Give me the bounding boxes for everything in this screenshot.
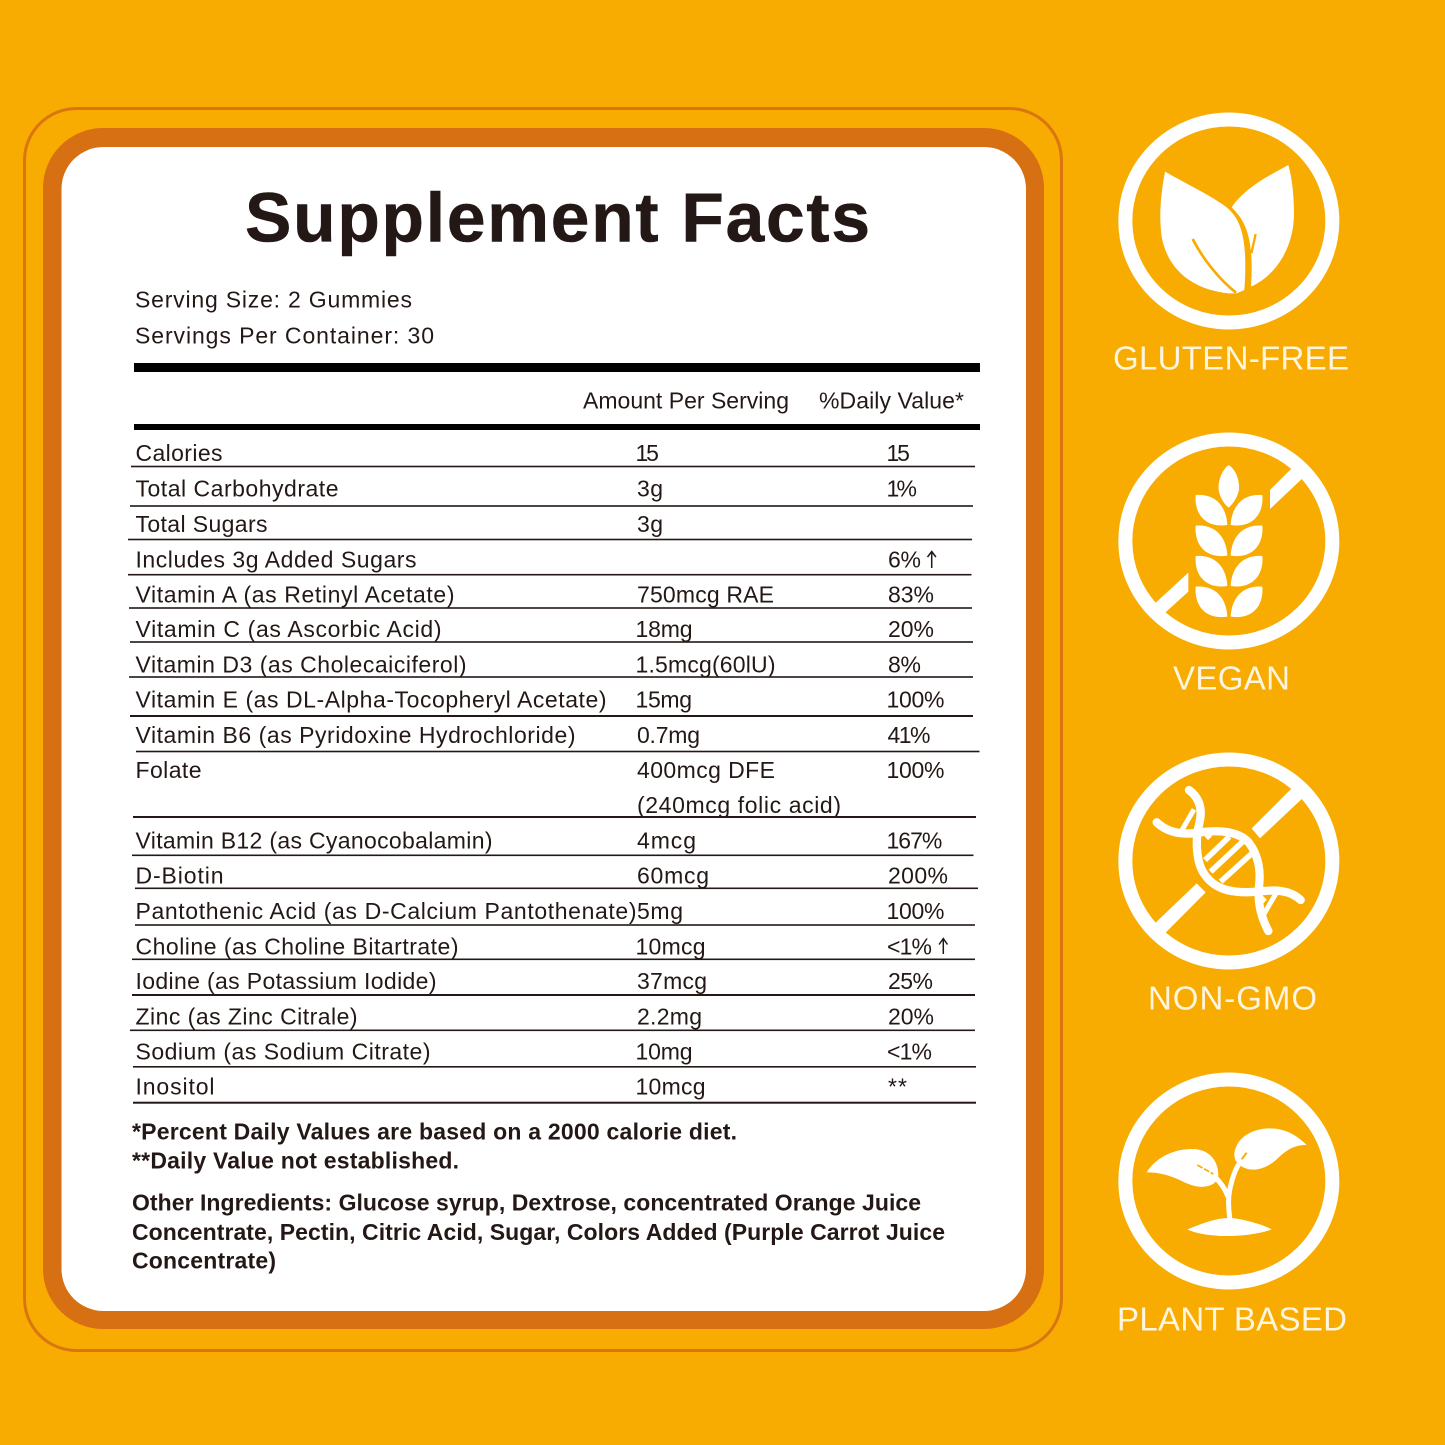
row: zinc: Zinc (as Zinc Citrale) xyxy=(136,1003,358,1029)
serving info xyxy=(135,286,434,348)
row: sodium: 10mg xyxy=(636,1039,692,1065)
row: iodine: Iodine (as Potassium Iodide) xyxy=(136,968,436,994)
row: vitamin A xyxy=(129,582,972,609)
nutrient table xyxy=(128,440,980,1104)
row: added sugars: Includes 3g Added Sugars xyxy=(136,547,416,573)
row: inositol xyxy=(133,1074,976,1104)
footnotes: **Daily Value not established. xyxy=(132,1147,459,1173)
other ingredients: Concentrate, Pectin, Citric Acid, Sugar, Colors Added (Purple Carrot Juice xyxy=(132,1219,945,1245)
badge: plant based xyxy=(1117,1079,1347,1338)
row: vitamin C: 20% xyxy=(888,616,934,642)
row: pantothenic acid xyxy=(135,898,975,926)
row: choline: Choline (as Choline Bitartrate) xyxy=(136,933,458,959)
row: iodine: 25% xyxy=(888,968,933,994)
row: inositol: Inositol xyxy=(136,1074,214,1100)
row: d-biotin: D-Biotin xyxy=(136,863,224,889)
badge: vegan xyxy=(1125,439,1332,696)
label: vegan: VEGAN xyxy=(1173,659,1290,696)
row: vitamin B12: 4mcg xyxy=(637,827,696,853)
row: vitamin B12: Vitamin B12 (as Cyanocobalamin) xyxy=(136,827,492,853)
row: vitamin E xyxy=(130,687,973,717)
table header: %Daily Value* xyxy=(819,387,964,413)
row: zinc xyxy=(130,1003,975,1031)
row: folate: (240mcg folic acid) xyxy=(637,792,841,818)
row: choline: <1% xyxy=(887,933,932,959)
row: sodium: Sodium (as Sodium Citrate) xyxy=(136,1039,430,1065)
icon: crossed dna helix xyxy=(1125,759,1332,962)
row: vitamin E: 100% xyxy=(886,687,944,713)
badge: non-gmo xyxy=(1125,759,1332,1016)
row: pantothenic acid: 5mg xyxy=(637,898,683,924)
row: total carbohydrate: 3g xyxy=(637,476,663,502)
row: vitamin B12: 167% xyxy=(886,827,942,853)
row: folate: 100% xyxy=(886,757,944,783)
footnotes: *Percent Daily Values are based on a 2000 calorie diet. xyxy=(132,1118,737,1144)
row: calories: 15 xyxy=(886,440,910,466)
row: calories xyxy=(131,440,975,467)
label: non-gmo: NON-GMO xyxy=(1148,979,1317,1016)
serving info: Servings Per Container: 30 xyxy=(135,322,434,348)
row: total carbohydrate xyxy=(130,476,973,507)
row: d-biotin: 60mcg xyxy=(637,863,709,889)
row: total carbohydrate: Total Carbohydrate xyxy=(136,476,338,502)
row: choline xyxy=(132,933,975,960)
row: pantothenic acid: Pantothenic Acid (as D-Calcium Pantothenate) xyxy=(136,898,636,924)
row: iodine xyxy=(132,968,975,996)
row: total sugars xyxy=(128,511,972,540)
row: vitamin D3 xyxy=(129,651,973,678)
label: plant based: PLANT BASED xyxy=(1117,1301,1347,1338)
row: vitamin C xyxy=(130,616,973,643)
row: vitamin B6: 41% xyxy=(888,722,930,748)
row: total sugars: Total Sugars xyxy=(136,511,268,537)
row: choline: 10mcg xyxy=(636,933,706,959)
icon: sprout xyxy=(1125,1079,1332,1282)
label: gluten-free: GLUTEN-FREE xyxy=(1113,339,1349,376)
row: vitamin B12 xyxy=(132,827,974,856)
row: folate xyxy=(133,757,976,818)
icon: up arrow xyxy=(939,938,948,954)
row: total carbohydrate: 1% xyxy=(886,476,917,502)
row: vitamin A: Vitamin A (as Retinyl Acetate) xyxy=(136,582,454,608)
row: zinc: 20% xyxy=(888,1003,934,1029)
row: vitamin A: 750mcg RAE xyxy=(637,582,774,608)
row: vitamin B6: Vitamin B6 (as Pyridoxine Hydrochloride) xyxy=(136,722,576,748)
row: vitamin D3: 1.5mcg(60lU) xyxy=(636,651,776,677)
panel: supplement facts label xyxy=(24,108,1062,1350)
row: vitamin D3: Vitamin D3 (as Cholecaiciferol) xyxy=(136,651,466,677)
other ingredients xyxy=(132,1190,945,1274)
row: total sugars: 3g xyxy=(637,511,663,537)
row: folate: 400mcg DFE xyxy=(637,757,775,783)
other ingredients: Concentrate) xyxy=(132,1248,276,1274)
row: added sugars: 6% xyxy=(888,547,921,573)
title: Supplement Facts xyxy=(245,179,870,257)
row: zinc: 2.2mg xyxy=(637,1003,702,1029)
row: vitamin B6: 0.7mg xyxy=(637,722,700,748)
row: sodium: <1% xyxy=(887,1039,932,1065)
row: vitamin E: 15mg xyxy=(636,687,692,713)
table header xyxy=(134,363,980,430)
row: inositol: 10mcg xyxy=(636,1074,706,1100)
footnotes xyxy=(132,1118,737,1173)
row: vitamin D3: 8% xyxy=(888,651,921,677)
icon: crossed wheat xyxy=(1125,439,1332,642)
row: inositol: ** xyxy=(888,1074,907,1100)
row: added sugars xyxy=(128,547,972,576)
table header: Amount Per Serving xyxy=(583,387,789,413)
row: vitamin C: 18mg xyxy=(636,616,692,642)
badge: gluten-free xyxy=(1113,119,1349,376)
row: d-biotin xyxy=(135,863,978,889)
row: vitamin E: Vitamin E (as DL-Alpha-Tocopheryl Acetate) xyxy=(136,687,606,713)
row: calories: 15 xyxy=(636,440,659,466)
serving info: Serving Size: 2 Gummies xyxy=(135,286,412,312)
icon: up arrow xyxy=(928,552,936,568)
row: calories: Calories xyxy=(136,440,222,466)
row: d-biotin: 200% xyxy=(888,863,948,889)
icon: leaves xyxy=(1125,119,1332,322)
row: vitamin B6 xyxy=(136,722,980,752)
row: vitamin A: 83% xyxy=(888,582,934,608)
other ingredients: Other Ingredients: Glucose syrup, Dextrose, concentrated Orange Juice xyxy=(132,1190,921,1216)
row: iodine: 37mcg xyxy=(637,968,707,994)
row: vitamin C: Vitamin C (as Ascorbic Acid) xyxy=(136,616,442,642)
row: pantothenic acid: 100% xyxy=(886,898,944,924)
row: sodium xyxy=(133,1039,976,1068)
row: folate: Folate xyxy=(136,757,202,783)
